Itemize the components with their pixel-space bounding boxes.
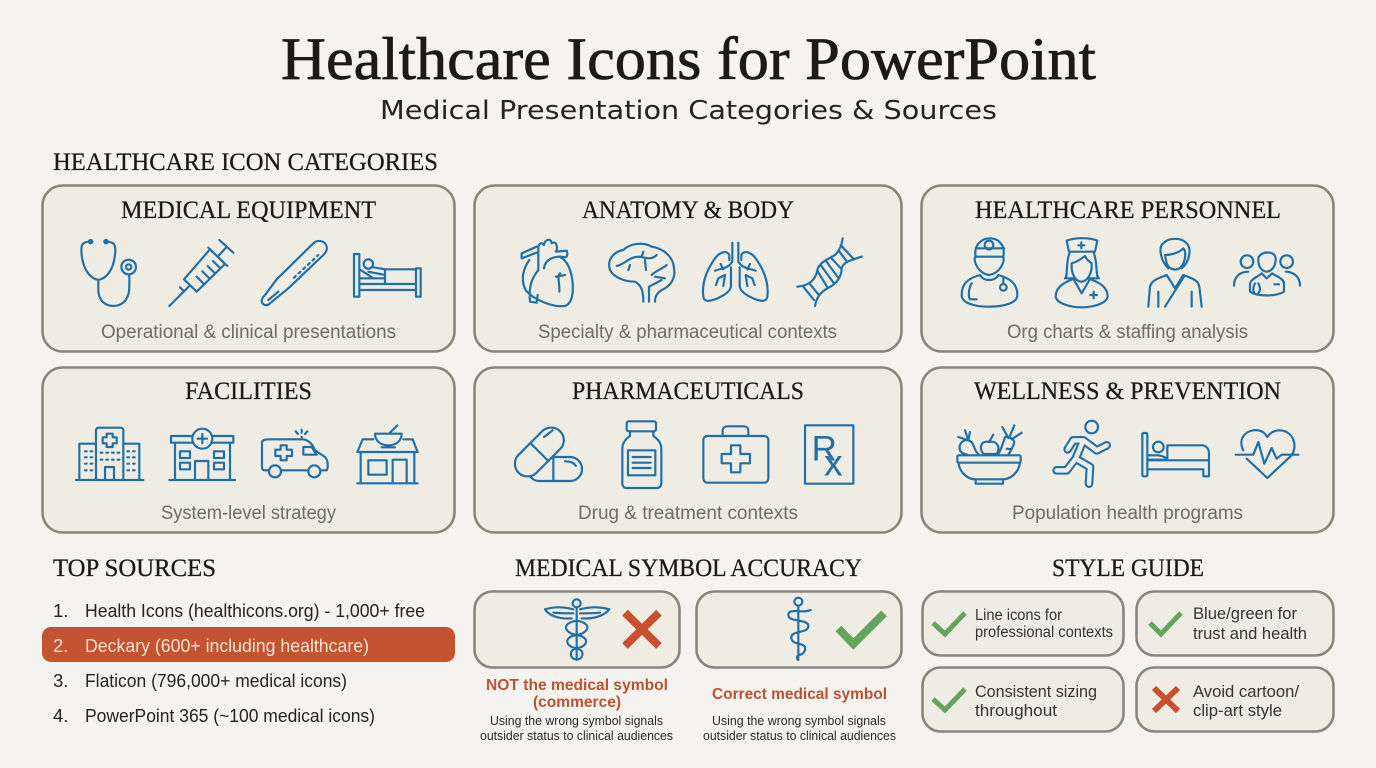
icons: symbols xyxy=(545,598,884,660)
icon: check xyxy=(933,613,965,634)
source 4: 4. xyxy=(53,705,68,726)
heading: pharmaceuticals: PHARMACEUTICALS xyxy=(572,378,804,405)
caption: facilities: System-level strategy xyxy=(161,503,336,524)
source 3 name: Flaticon (796,000+ medical icons) xyxy=(85,670,347,691)
source 2: 2. xyxy=(53,635,68,656)
source 1 name: Health Icons (healthicons.org) - 1,000+ free xyxy=(85,600,425,621)
icon: ambulance xyxy=(262,430,328,477)
heading: medical equipment: MEDICAL EQUIPMENT xyxy=(121,197,376,224)
source 4 name: PowerPoint 365 (~100 medical icons) xyxy=(85,705,375,726)
section: medical symbol accuracy xyxy=(474,555,902,743)
source 3: 3. xyxy=(53,670,68,691)
text: avoid cartoon: Avoid cartoon/ xyxy=(1193,682,1299,701)
icon: nurse xyxy=(1056,238,1108,307)
card: blue green xyxy=(1136,592,1334,656)
icon: rod of asclepius xyxy=(788,598,811,660)
text: line icons: Line icons for xyxy=(975,607,1062,624)
card: line icons xyxy=(922,592,1124,656)
text: blue green: Blue/green for xyxy=(1193,604,1297,623)
label: not the medical symbol: NOT the medical symbol xyxy=(486,677,668,694)
title: Healthcare Icons for PowerPoint xyxy=(281,26,1096,92)
icons: personnel xyxy=(962,238,1300,307)
icons: medical equipment xyxy=(81,240,421,306)
icon: heart with pulse xyxy=(1236,430,1298,478)
icon: rx prescription: R xyxy=(812,429,837,468)
text: consistent sizing: Consistent sizing xyxy=(975,682,1097,701)
icon: hospital xyxy=(76,428,143,480)
panel: wellness and prevention xyxy=(922,368,1334,532)
icon: bed xyxy=(1142,433,1209,476)
panel: healthcare personnel xyxy=(922,186,1334,352)
heading: healthcare personnel: HEALTHCARE PERSONNEL xyxy=(975,197,1281,224)
icon: clinician xyxy=(1148,239,1202,307)
icon: fruit bowl xyxy=(957,425,1022,484)
panel: anatomy and body xyxy=(474,186,902,352)
icon: check xyxy=(1150,613,1181,634)
icon: stethoscope xyxy=(81,240,136,306)
text: clip-art style: clip-art style xyxy=(1193,701,1282,720)
source 2 name: Deckary (600+ including healthcare) xyxy=(85,635,369,656)
icons: wellness xyxy=(957,421,1298,484)
panel: pharmaceuticals xyxy=(474,368,902,532)
note: wrong symbol line 1: Using the wrong symbol signals xyxy=(490,714,663,728)
caption: medical equipment: Operational & clinical presentations xyxy=(101,322,396,343)
card: rod of asclepius correct symbol xyxy=(696,592,902,668)
icon: capsules xyxy=(510,422,582,482)
icon: brain xyxy=(609,244,674,302)
caption: wellness and prevention: Population health programs xyxy=(1012,503,1243,524)
icon: dna helix xyxy=(797,238,862,306)
heading: wellness and prevention: WELLNESS & PREVENTION xyxy=(974,378,1281,405)
icon: syringe xyxy=(169,240,233,306)
icon: clinic xyxy=(169,429,235,480)
text: throughout: throughout xyxy=(975,701,1057,720)
icon: care team xyxy=(1234,252,1300,295)
note: correct symbol line 1: Using the wrong symbol signals xyxy=(712,714,886,728)
icon: check xyxy=(933,689,965,710)
caption: healthcare personnel: Org charts & staffing analysis xyxy=(1007,322,1248,343)
icons: anatomy xyxy=(522,238,862,306)
card: avoid cartoon xyxy=(1136,668,1334,732)
card: consistent sizing xyxy=(922,668,1124,732)
panel: medical equipment xyxy=(42,186,454,352)
text: trust and health: trust and health xyxy=(1193,624,1307,643)
label: commerce: (commerce) xyxy=(533,694,621,711)
subtitle: Medical Presentation Categories & Sources xyxy=(380,96,997,126)
icon: rx prescription: x xyxy=(824,441,843,483)
icon: heart xyxy=(522,240,573,306)
icon: caduceus xyxy=(545,599,609,660)
section: top sources xyxy=(42,555,455,726)
icon: runner xyxy=(1057,421,1107,484)
icons: pharmaceuticals xyxy=(510,421,853,488)
heading: top sources: TOP SOURCES xyxy=(53,555,216,582)
source 1: 1. xyxy=(53,600,68,621)
caption: anatomy and body: Specialty & pharmaceutical contexts xyxy=(538,322,837,343)
icon: hospital bed xyxy=(354,254,421,297)
icons: facilities xyxy=(76,425,418,483)
caption: pharmaceuticals: Drug & treatment contexts xyxy=(578,503,798,524)
icon: doctor xyxy=(962,238,1017,307)
text: professional contexts: professional contexts xyxy=(975,624,1113,641)
icon: cross xyxy=(1154,688,1178,711)
icon: wrong cross xyxy=(625,613,659,646)
icon: correct check xyxy=(838,613,884,644)
icon: pharmacy xyxy=(357,425,418,483)
icon: first aid kit xyxy=(703,426,768,483)
panel: facilities xyxy=(42,368,454,532)
note: wrong symbol line 2: outsider status to clinical audiences xyxy=(480,729,673,743)
icon: thermometer xyxy=(262,241,327,305)
heading: facilities: FACILITIES xyxy=(185,378,312,405)
label: correct medical symbol: Correct medical symbol xyxy=(712,686,887,703)
section: style guide xyxy=(922,555,1334,732)
heading: style guide: STYLE GUIDE xyxy=(1052,555,1204,582)
heading: anatomy and body: ANATOMY & BODY xyxy=(582,197,794,224)
icon: pill bottle xyxy=(622,421,661,488)
note: correct symbol line 2: outsider status to clinical audiences xyxy=(703,729,896,743)
icon: rx prescription xyxy=(805,425,853,484)
highlighted row background xyxy=(42,627,455,662)
heading: healthcare icon categories: HEALTHCARE ICON CATEGORIES xyxy=(53,149,438,176)
icon: lungs xyxy=(703,243,768,301)
card: caduceus wrong symbol xyxy=(474,592,680,668)
heading: medical symbol accuracy: MEDICAL SYMBOL ACCURACY xyxy=(515,555,862,582)
